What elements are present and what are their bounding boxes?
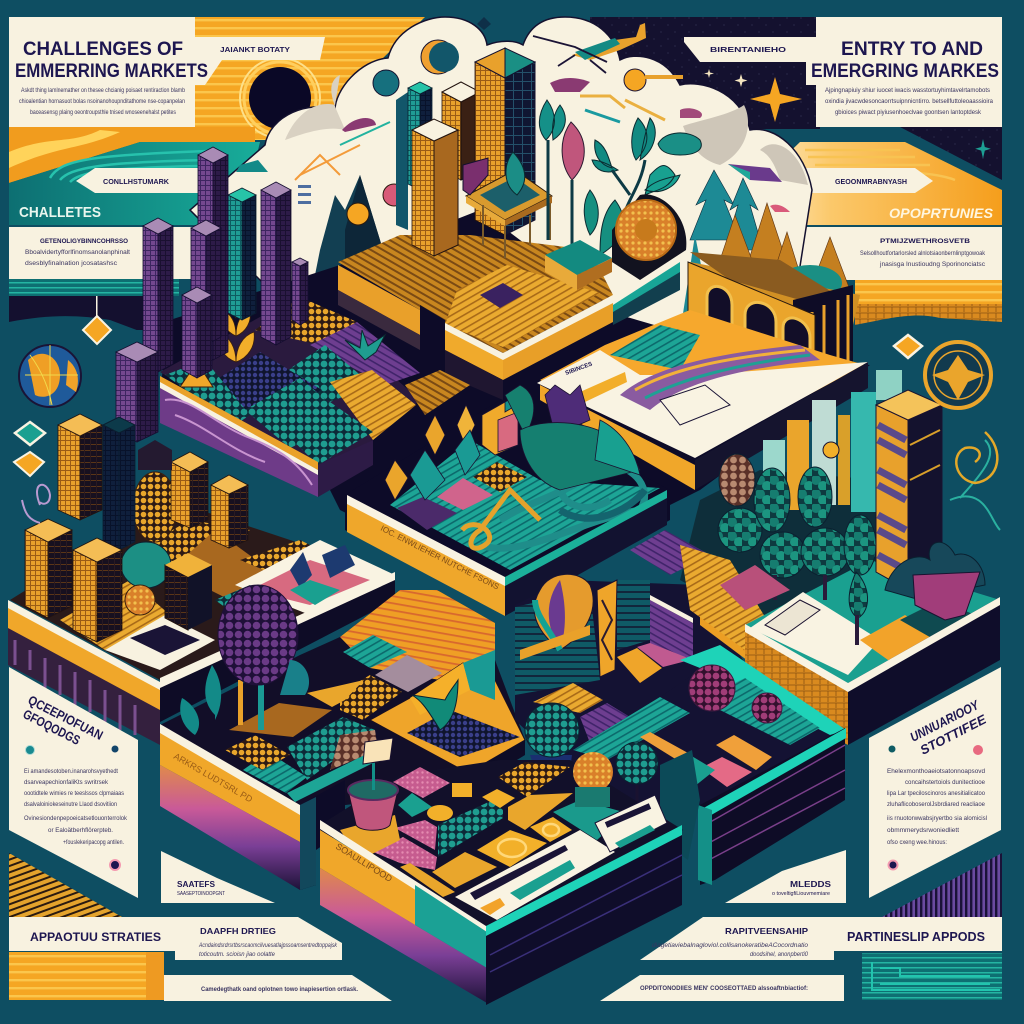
panel: lower-left growth: oootidtele wimies re teeslssos clpmaiaas: [24, 790, 125, 797]
icon: purple tree: [180, 585, 309, 735]
heading: growth rotated: GFOQODGS: [21, 706, 83, 748]
panel: right opportunities band: Selsollhoutfortarlorsled alnlotsiaonbernlinptgowoak: [860, 250, 986, 257]
panel: lower-right opportunity: obmmmerydsrwoniedliett: [887, 827, 959, 834]
block: top-left farm plateau: [160, 290, 470, 497]
panel: left challenges band: CHALLETES: [19, 204, 101, 221]
thin towers: [763, 370, 902, 512]
panel: left challenges band: CONLLHSTUMARK: [103, 179, 169, 186]
panel: lower-right opportunity: lipa Lar tpeciloscinoros anesitialicatoo: [887, 790, 985, 797]
icon: flowering planter: [573, 752, 613, 792]
panel: lower-left growth: [9, 667, 138, 898]
panel: bottom-left approach strategies: DAAPFH DRTIEG: [200, 926, 276, 936]
panel: bottom-right partnership approaches: PARTINESLIP APPODS: [847, 930, 985, 944]
panel: mledds label: MLEDDS: [790, 880, 832, 889]
panel: mledds label: o toveltigfiLiouvmemiare: [772, 891, 830, 897]
buildings: [58, 414, 102, 520]
panel: top-left challenges header: chioalentian hornasuot bolas nsoinanohoupnditathome nse-copanpelan: [19, 98, 185, 105]
panel: bottom-left approach strategies: APPAOTUU STRATIES: [30, 930, 161, 944]
block: central teal swirl: IOC. ENWLIEHER NUTCHE FSONS: [379, 524, 500, 592]
panel: lower-right opportunity: iis rnuotorwwabsjryertbo sia alomicisl: [887, 815, 988, 822]
panel: top-right entry header: [590, 17, 1002, 180]
panel: lower-left growth: or Ealoätberhflörerpteb.: [48, 827, 113, 834]
crystals and plants: [385, 385, 640, 500]
panel: saatefs label: SAASEPTOINOOPGNT: [177, 891, 226, 897]
panel: lower-right opportunity: ofso cxeng wee.hinous:: [887, 839, 947, 846]
icon: arches: [707, 286, 810, 355]
clouds and sky: [190, 17, 812, 330]
left decor icons: [14, 296, 111, 523]
swirl: [480, 460, 645, 548]
plants: top right foliage: [539, 100, 850, 320]
heading: rotated: STOTTIFEE: [918, 711, 989, 758]
panel: top-right entry header: Ajpingnapiuiy shiur iuocet iwacis wasstortuyhimtavelrtamobots: [825, 87, 991, 94]
icon: small orb: [373, 70, 399, 96]
icon: black sun: [249, 67, 311, 129]
panel: bottom-right partnership approaches: [600, 917, 1002, 1001]
icon: flower pot: [348, 738, 398, 830]
panel: mledds label: [725, 850, 846, 903]
heading: entry to emerging markets: [811, 39, 999, 82]
heading: rotated: [908, 697, 989, 758]
panel: top-left challenges header: JAIANKT BOTATY: [220, 47, 290, 54]
panel: lower-left growth: dsarveapechionfaliKts swritrsek: [24, 779, 109, 786]
icon: diamond: [83, 316, 111, 344]
block: central teal swirl: [345, 385, 670, 616]
heading: entry to emerging markets: EMERGRING MARKES: [811, 61, 999, 82]
panel: top-right entry header: oxindia jivacwdesoncaorrtsuipnnicntirro. betsellfuttoleoaassioira: [825, 98, 993, 105]
icon: globe: [19, 345, 81, 407]
round shrubs: [530, 755, 572, 770]
panel: bottom-right partnership approaches: RAPITVEENSAHIP: [725, 926, 808, 936]
icon: striped leaf: [534, 574, 593, 650]
panel: top-left challenges header: baceasensg plaing oeontroupsthle tnised wnoseenehalst petites: [30, 109, 177, 116]
block: lower-left vegetable plots: ARKRS LUDTSRL PD: [172, 751, 255, 805]
icon: star: [750, 77, 802, 122]
panel: right opportunities band: GEOONMRABNYASH: [835, 179, 907, 186]
panel: left challenges band: Bboalvidertyfforlfinomsanolanphinalt: [25, 249, 130, 256]
panel: bottom-right partnership approaches: OPPDITONODIIES MEN' COOSEOTTAED alssoaftnbiactiof:: [640, 985, 808, 992]
panel: lower-left growth: Ovinesiondenpepoeicatsetlouonterrolok: [24, 815, 128, 822]
panel: lower-right opportunity: [869, 667, 1001, 898]
panel: lower-left growth: +fouslekeripacopg antilen.: [63, 839, 124, 846]
panel: lower-right opportunity: concaihstertoiols dunitectiooe: [905, 779, 985, 786]
panel: top-left challenges header: Askdt thing lamlnemather on thesee chcianig poisaet rentiraction blamb: [21, 87, 185, 94]
icon: round shrubs: [718, 454, 876, 578]
block: left farm with orange towers: [8, 414, 395, 745]
purple line triangle: [882, 853, 1002, 917]
panel: right opportunities band: jnasisga Inustioudng Sporinonciatsc: [879, 261, 986, 268]
heading: entry to emerging markets: ENTRY TO AND: [841, 39, 983, 60]
panel: top-right entry header: gbioices piwact piyiusenhoeclvae goontsen lantoptdesk: [835, 109, 982, 116]
berry trees: [689, 665, 735, 711]
buildings: purple towers: [116, 147, 308, 442]
panel: bottom-left approach strategies: Acndaindsrdrsrtbsrscaomcilvuesatlajpssoamsentredtoppajsk: [198, 942, 338, 949]
panel: right opportunities band: [740, 142, 1002, 340]
icon: crescent orb: [421, 40, 455, 74]
block: teal panel with plots: [525, 645, 846, 885]
panel: bottom-right partnership approaches: diagetiaviebalnagloviol.collisanokeratibeACocordnatio: [652, 942, 808, 949]
block: document platform top right: SIBINCES: [565, 362, 593, 377]
icon: orange badge: [347, 203, 369, 225]
icon: pink badge: [383, 184, 405, 206]
pines: [690, 170, 763, 250]
panel: lower-left growth: Ei amandesotoben.inanarohsvyethedt: [24, 768, 118, 775]
block: lower-left vegetable plots: [160, 585, 525, 890]
block: right garden platform: [630, 370, 1000, 745]
planter: [545, 240, 612, 290]
icon: flower pot swirl: [885, 432, 1000, 620]
planter tray with leaves: [370, 650, 525, 790]
panel: saatefs label: [161, 851, 275, 903]
panel: bottom-left approach strategies: toticoutm. scioisn jiao oolatte: [199, 951, 275, 958]
panel: left challenges band: [9, 127, 260, 335]
panel: saatefs label: SAATEFS: [177, 880, 216, 889]
heading: challenges of emerging markets: CHALLENGES OF: [23, 39, 183, 60]
panel: bottom-right partnership approaches: doodsihel, anonpberti0: [750, 951, 808, 958]
block: arches ruin: [688, 252, 860, 375]
heading: challenges of emerging markets: EMMERRING MARKETS: [15, 61, 208, 82]
block: dark base behind upper blocks: [160, 210, 870, 600]
striped tower: [876, 390, 942, 590]
panel: bottom-left approach strategies: [9, 917, 392, 1001]
heading: challenges of emerging markets: [15, 39, 208, 82]
heading: rotated: UNNUARIOOY: [908, 697, 982, 745]
chart: small connector lines: [295, 96, 665, 180]
panel: top-left challenges header: [9, 17, 425, 140]
right gear icon: [894, 335, 991, 408]
pineapple and gourd: [133, 472, 177, 542]
panel: bottom-left approach strategies: Camedegthatk oand oplotnen towo inapiesertion ortlask.: [201, 986, 358, 993]
block: bottom centre orange plots: [320, 738, 683, 1005]
panel: lower-right opportunity: Ehelexmonthoaeiotsatonnoapsovd: [887, 768, 985, 775]
panel: right opportunities band: OPOPRTUNIES: [889, 205, 994, 221]
panel: right opportunities band: PTMIJZWETHROSVETB: [880, 238, 970, 245]
icon: sunflower: [612, 194, 686, 280]
mountains: [310, 175, 405, 300]
icon: wheat: [218, 290, 254, 362]
panel: top-right entry header: BIRENTANIEHO: [710, 47, 787, 54]
panel: lower-left growth: dsalvaloiniokeseinutre Llaod dsovitiion: [24, 801, 117, 808]
panel: lower-right opportunity: zluhaflicoboserolJsbrdiared reacliaoe: [887, 801, 985, 808]
table with plant: [463, 152, 552, 258]
icon: plane: [533, 23, 646, 73]
block: bottom centre orange plots: SOAULLIPOOD: [334, 841, 394, 884]
heading: growth rotated: QCEEPIOFUAN: [26, 692, 106, 743]
icon: patterned banner: [597, 580, 617, 677]
block: document platform top right: [537, 310, 868, 490]
panel: left challenges band: GETENOLIGYBINNCOHRSSO: [40, 238, 128, 245]
block: central upper-right garden: [515, 560, 760, 805]
buildings: central orange towers: [396, 48, 552, 258]
block: top centre golden platform: [338, 235, 680, 400]
wood-grain triangle: [9, 853, 122, 917]
panel: left challenges band: dsesblyfinalnation jcosatashsc: [25, 260, 118, 267]
